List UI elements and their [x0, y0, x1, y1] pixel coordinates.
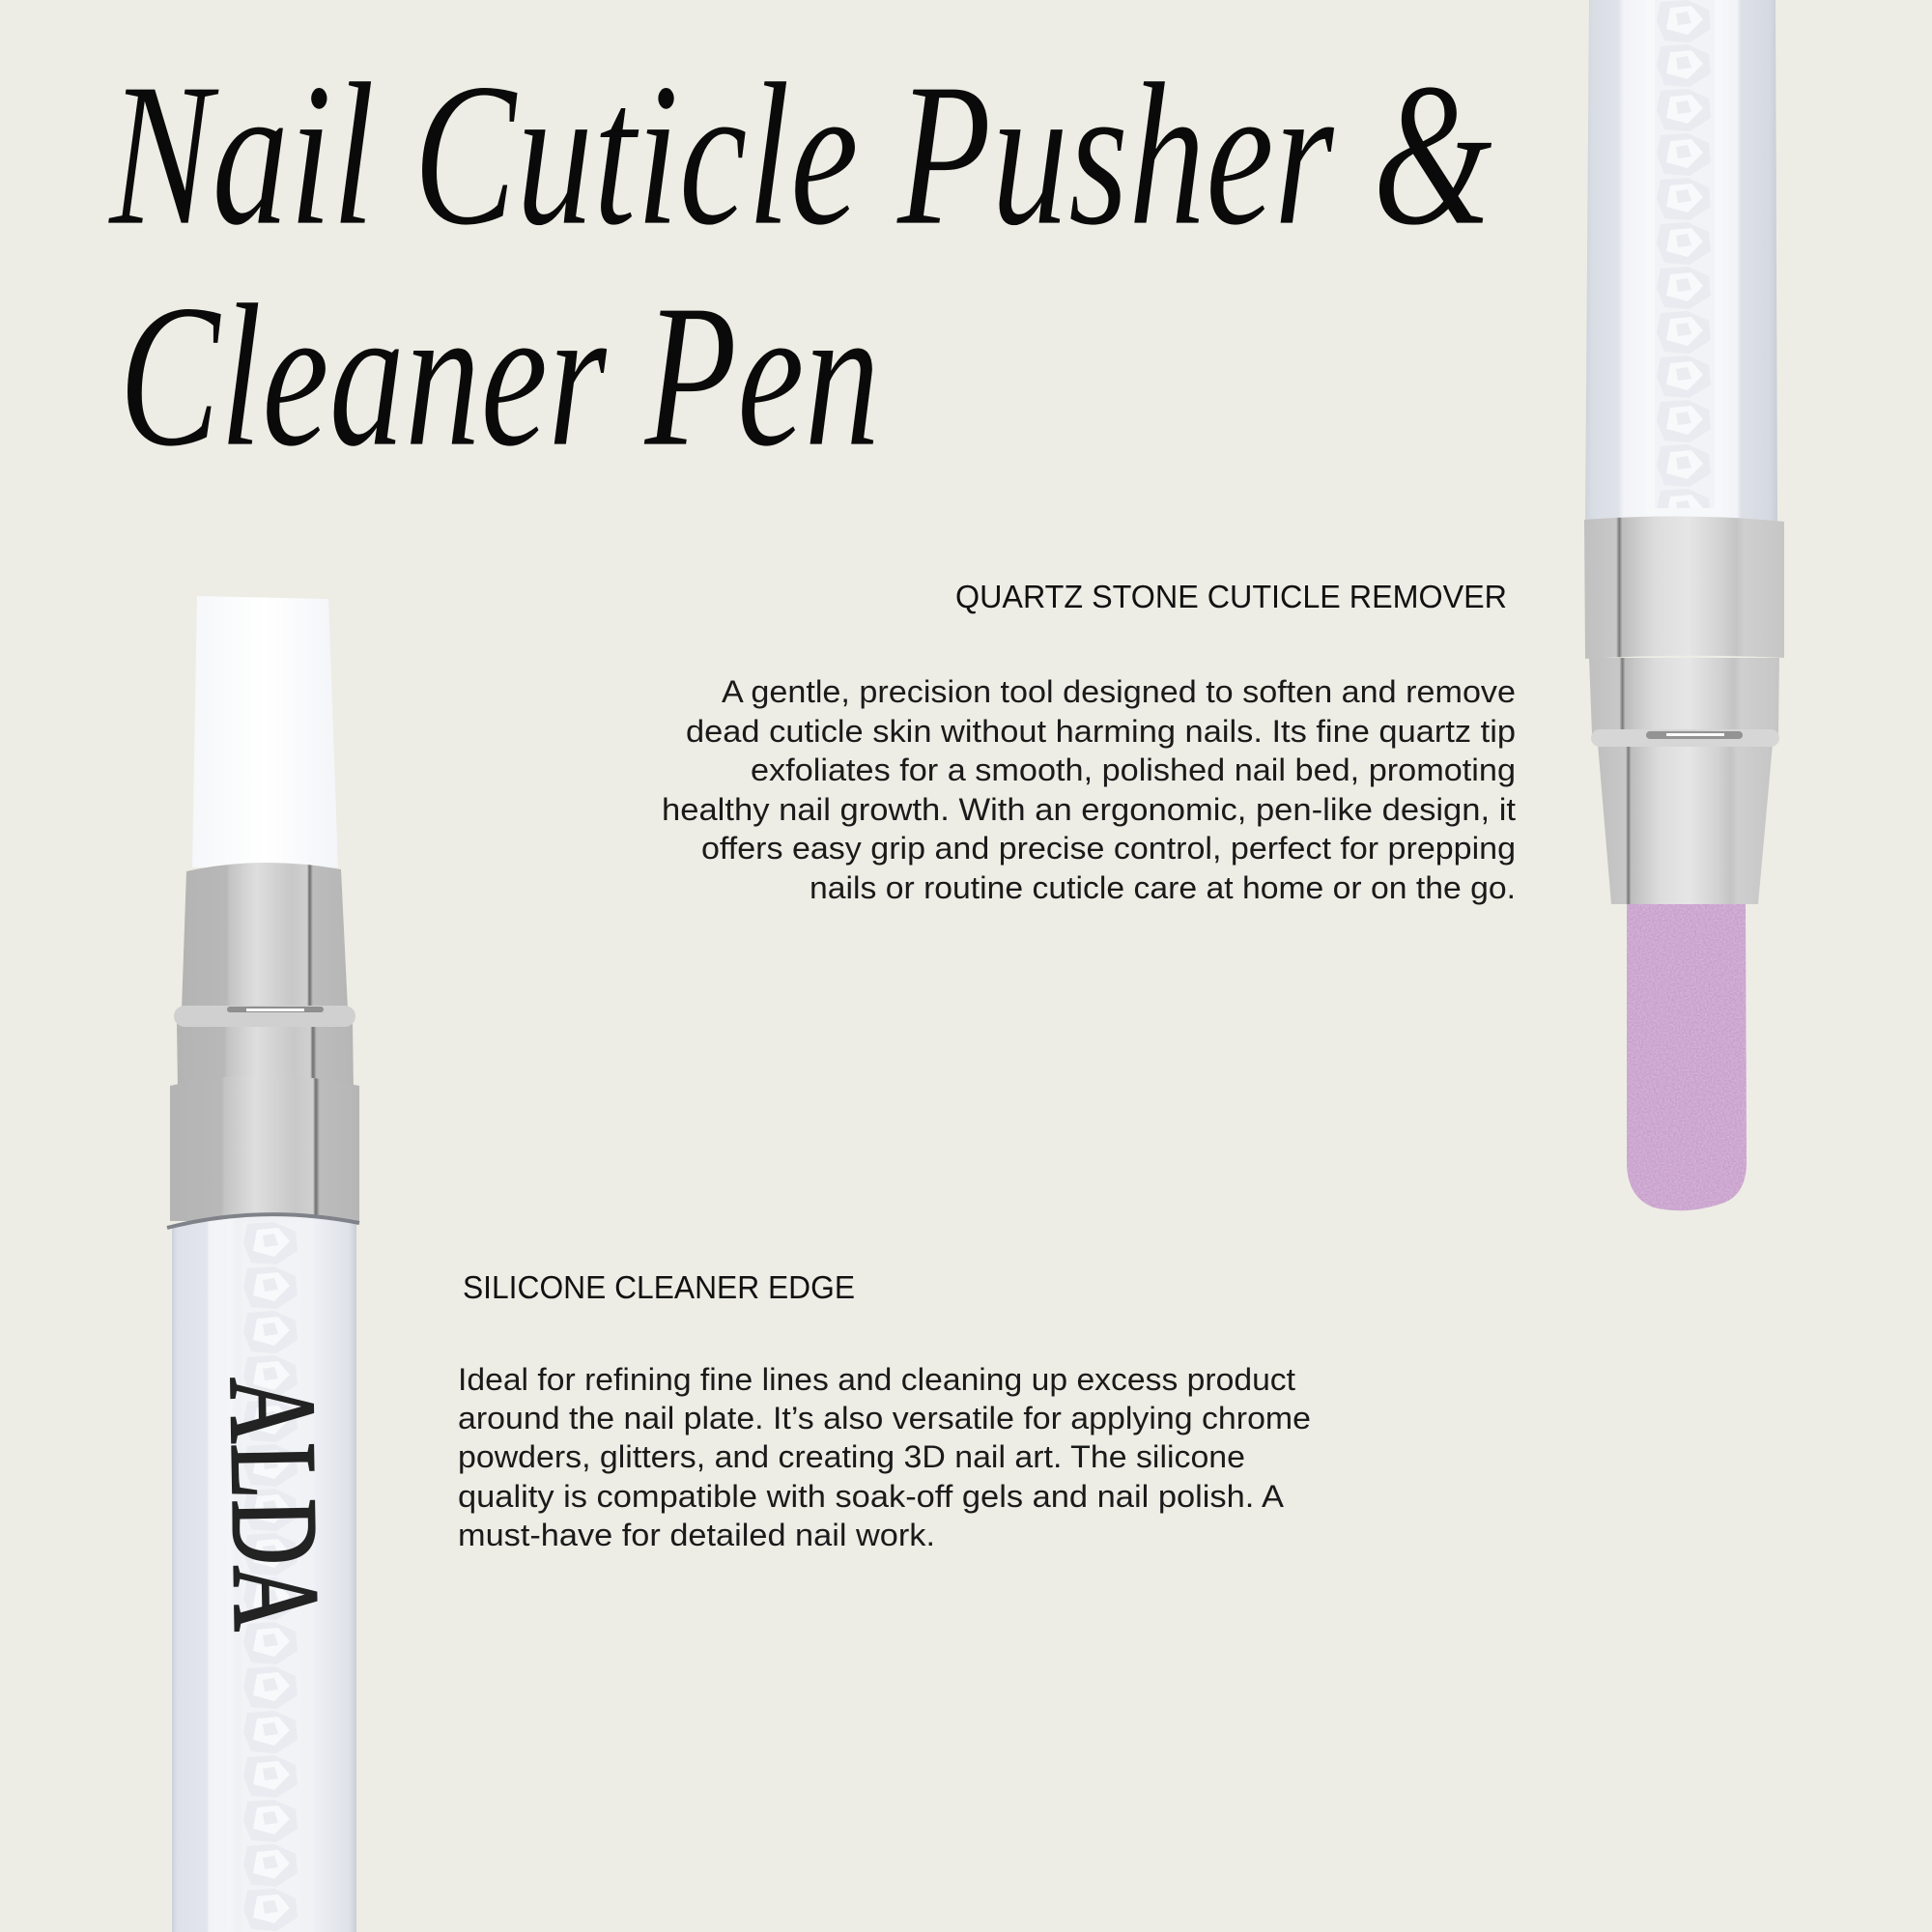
metal collar	[170, 863, 359, 1221]
glass barrel	[167, 1213, 359, 1932]
glass barrel	[1585, 0, 1777, 522]
text block: silicone description: powders, glitters, and creating 3D nail art. The silicone	[458, 1439, 1245, 1474]
text block: quartz description: A gentle, precision tool designed to soften and remove	[722, 674, 1516, 709]
silicone tip	[192, 596, 338, 867]
text block: quartz description	[662, 674, 1516, 905]
brand: ALDA: ALDA	[204, 1376, 346, 1632]
text block: silicone description	[458, 1362, 1311, 1552]
text block: quartz description: healthy nail growth. With an ergonomic, pen-like design, it	[662, 792, 1516, 827]
pen: silicone cleaner edge	[167, 596, 359, 1932]
title	[107, 41, 1492, 489]
title: Cleaner Pen	[119, 262, 880, 489]
text block: quartz description: exfoliates for a smooth, polished nail bed, promoting	[751, 753, 1516, 787]
text block: silicone description: quality is compatible with soak-off gels and nail polish. A	[458, 1479, 1285, 1514]
text block: silicone description: Ideal for refining fine lines and cleaning up excess product	[458, 1362, 1295, 1397]
text block: quartz description: offers easy grip and precise control, perfect for prepping	[701, 831, 1516, 866]
text block: quartz description: nails or routine cuticle care at home or on the go.	[810, 870, 1516, 905]
pen: quartz stone cuticle remover	[1584, 0, 1784, 1210]
title: Nail Cuticle Pusher &	[107, 41, 1492, 268]
text block: silicone description: must-have for detailed nail work.	[458, 1518, 935, 1552]
quartz tip	[1627, 904, 1747, 1210]
text block: silicone description: around the nail plate. It’s also versatile for applying chrome	[458, 1401, 1311, 1435]
text block: quartz description: dead cuticle skin without harming nails. Its fine quartz tip	[686, 714, 1516, 749]
heading: quartz stone cuticle remover: QUARTZ STONE CUTICLE REMOVER	[955, 579, 1507, 614]
heading: silicone cleaner edge: SILICONE CLEANER EDGE	[463, 1269, 855, 1305]
metal collar	[1584, 516, 1784, 904]
